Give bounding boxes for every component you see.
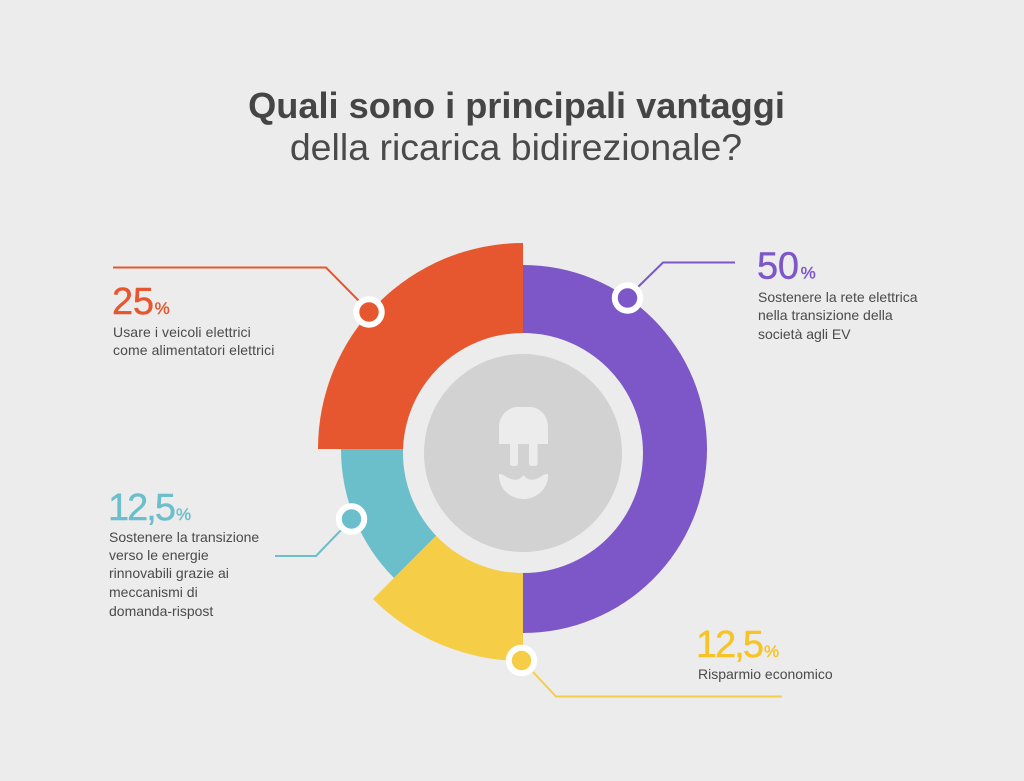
label: Sostenere la transizione <box>109 529 259 545</box>
marker <box>509 648 534 673</box>
leader line <box>113 268 360 302</box>
callout: 50% <box>615 246 918 342</box>
label: meccanismi di <box>109 584 198 600</box>
segment: 12,5% teal <box>341 449 523 578</box>
title: Quali sono i principali vantaggi <box>248 85 785 126</box>
label: come alimentatori elettrici <box>113 342 274 358</box>
label: verso le energie <box>109 547 209 563</box>
label: nella transizione della <box>758 307 893 323</box>
donut chart <box>318 243 707 661</box>
label: domanda-rispost <box>109 603 213 619</box>
label: Usare i veicoli elettrici <box>113 324 251 340</box>
leader line <box>638 262 735 287</box>
leader line <box>533 672 782 696</box>
title <box>248 85 785 168</box>
marker <box>615 285 640 311</box>
label: società agli EV <box>758 326 851 342</box>
segment: 50% purple <box>523 265 707 633</box>
value: 50% <box>757 246 816 288</box>
center circle <box>424 354 622 552</box>
center hole <box>403 333 643 573</box>
leader line <box>275 529 342 556</box>
callout: 12,5% teal <box>108 487 364 619</box>
segment: 25% orange <box>318 243 523 449</box>
callout: 12,5% yellow <box>509 624 833 696</box>
marker <box>339 506 364 532</box>
marker <box>356 299 382 325</box>
segment: 12,5% yellow <box>373 449 523 661</box>
label: Sostenere la rete elettrica <box>758 289 918 305</box>
value: 25% <box>112 281 170 323</box>
value: 12,5% <box>696 624 779 666</box>
title: della ricarica bidirezionale? <box>290 126 742 168</box>
icon: plug <box>499 407 548 499</box>
callout: 25% <box>112 268 382 358</box>
label: Risparmio economico <box>698 666 833 682</box>
value: 12,5% <box>108 487 191 529</box>
label: rinnovabili grazie ai <box>109 565 229 581</box>
